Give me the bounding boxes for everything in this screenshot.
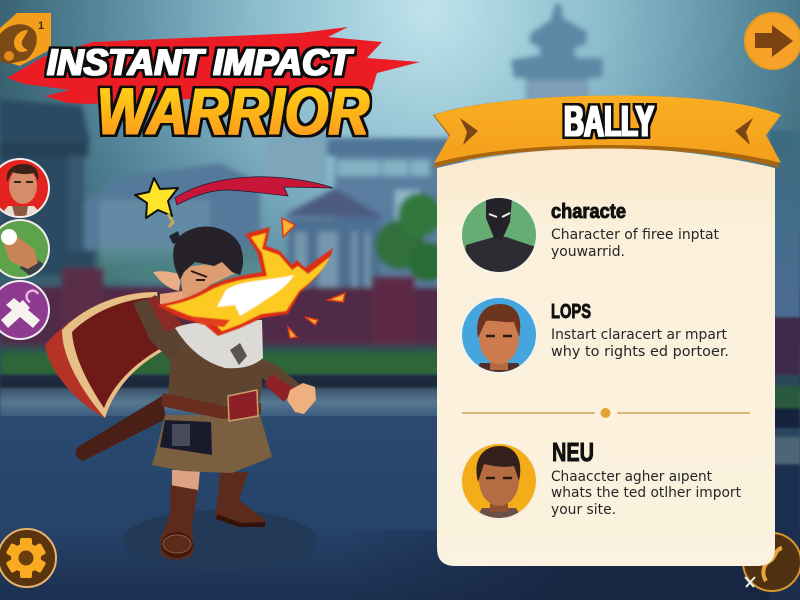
entry two heading: LOPS [551, 301, 591, 323]
side icon: purple tools [0, 280, 50, 340]
title line two: WARRIOR [97, 74, 369, 148]
pouch [160, 420, 212, 455]
ground shadow [123, 510, 317, 570]
entry three description: your site. [551, 502, 616, 518]
ear [153, 271, 181, 291]
side icon: green fist [0, 219, 50, 282]
cape [45, 292, 165, 418]
banner title: BALLY [564, 97, 654, 146]
side icon: red portrait [0, 158, 50, 222]
entry one [460, 196, 719, 277]
entry one heading: characte [551, 201, 626, 223]
panel: character roster [433, 95, 781, 566]
torso [165, 330, 262, 410]
title line one: INSTANT IMPACT [47, 42, 354, 83]
scarf [175, 320, 263, 368]
title: instant impact warrior [7, 27, 420, 148]
arm right with cuff [260, 358, 302, 402]
divider [462, 408, 750, 418]
icon: next arrow button [745, 13, 800, 69]
title red brush backdrop [7, 27, 420, 104]
entry one description: Character of firee inptat [551, 227, 719, 243]
entry three heading: NEU [552, 437, 594, 467]
avatar: boy on yellow [462, 444, 536, 518]
panel body [437, 148, 775, 566]
flame [157, 227, 333, 336]
icon: settings gear [0, 529, 56, 587]
avatar: boy on blue [460, 296, 538, 375]
entry two [460, 296, 729, 375]
hand on cape [160, 291, 185, 307]
kilt [152, 415, 272, 473]
face [180, 262, 238, 305]
entry three description: whats the ted otlher import [551, 485, 741, 501]
icon: top left badge [0, 13, 51, 66]
entry three description: Chaaccter agher aıpent [551, 469, 712, 485]
entry one description: youwarrid. [551, 244, 625, 260]
sleeve left [133, 295, 190, 360]
belt [161, 393, 261, 419]
icon: corner gear behind panel [743, 533, 800, 591]
scabbard [76, 396, 166, 461]
entry three [462, 442, 741, 518]
icon: top left badge: 1 [38, 20, 44, 32]
hair [173, 226, 243, 280]
banner ribbon [433, 95, 781, 168]
avatar: dark armored character [460, 196, 538, 277]
entry two description: why to rights ed portoer. [551, 344, 729, 360]
star with tail [135, 177, 333, 227]
flame sparks [282, 218, 345, 338]
fist [287, 383, 316, 414]
character: warrior [45, 177, 345, 570]
entry two description: Instart claracert ar mpart [551, 327, 728, 343]
boots [160, 470, 265, 560]
